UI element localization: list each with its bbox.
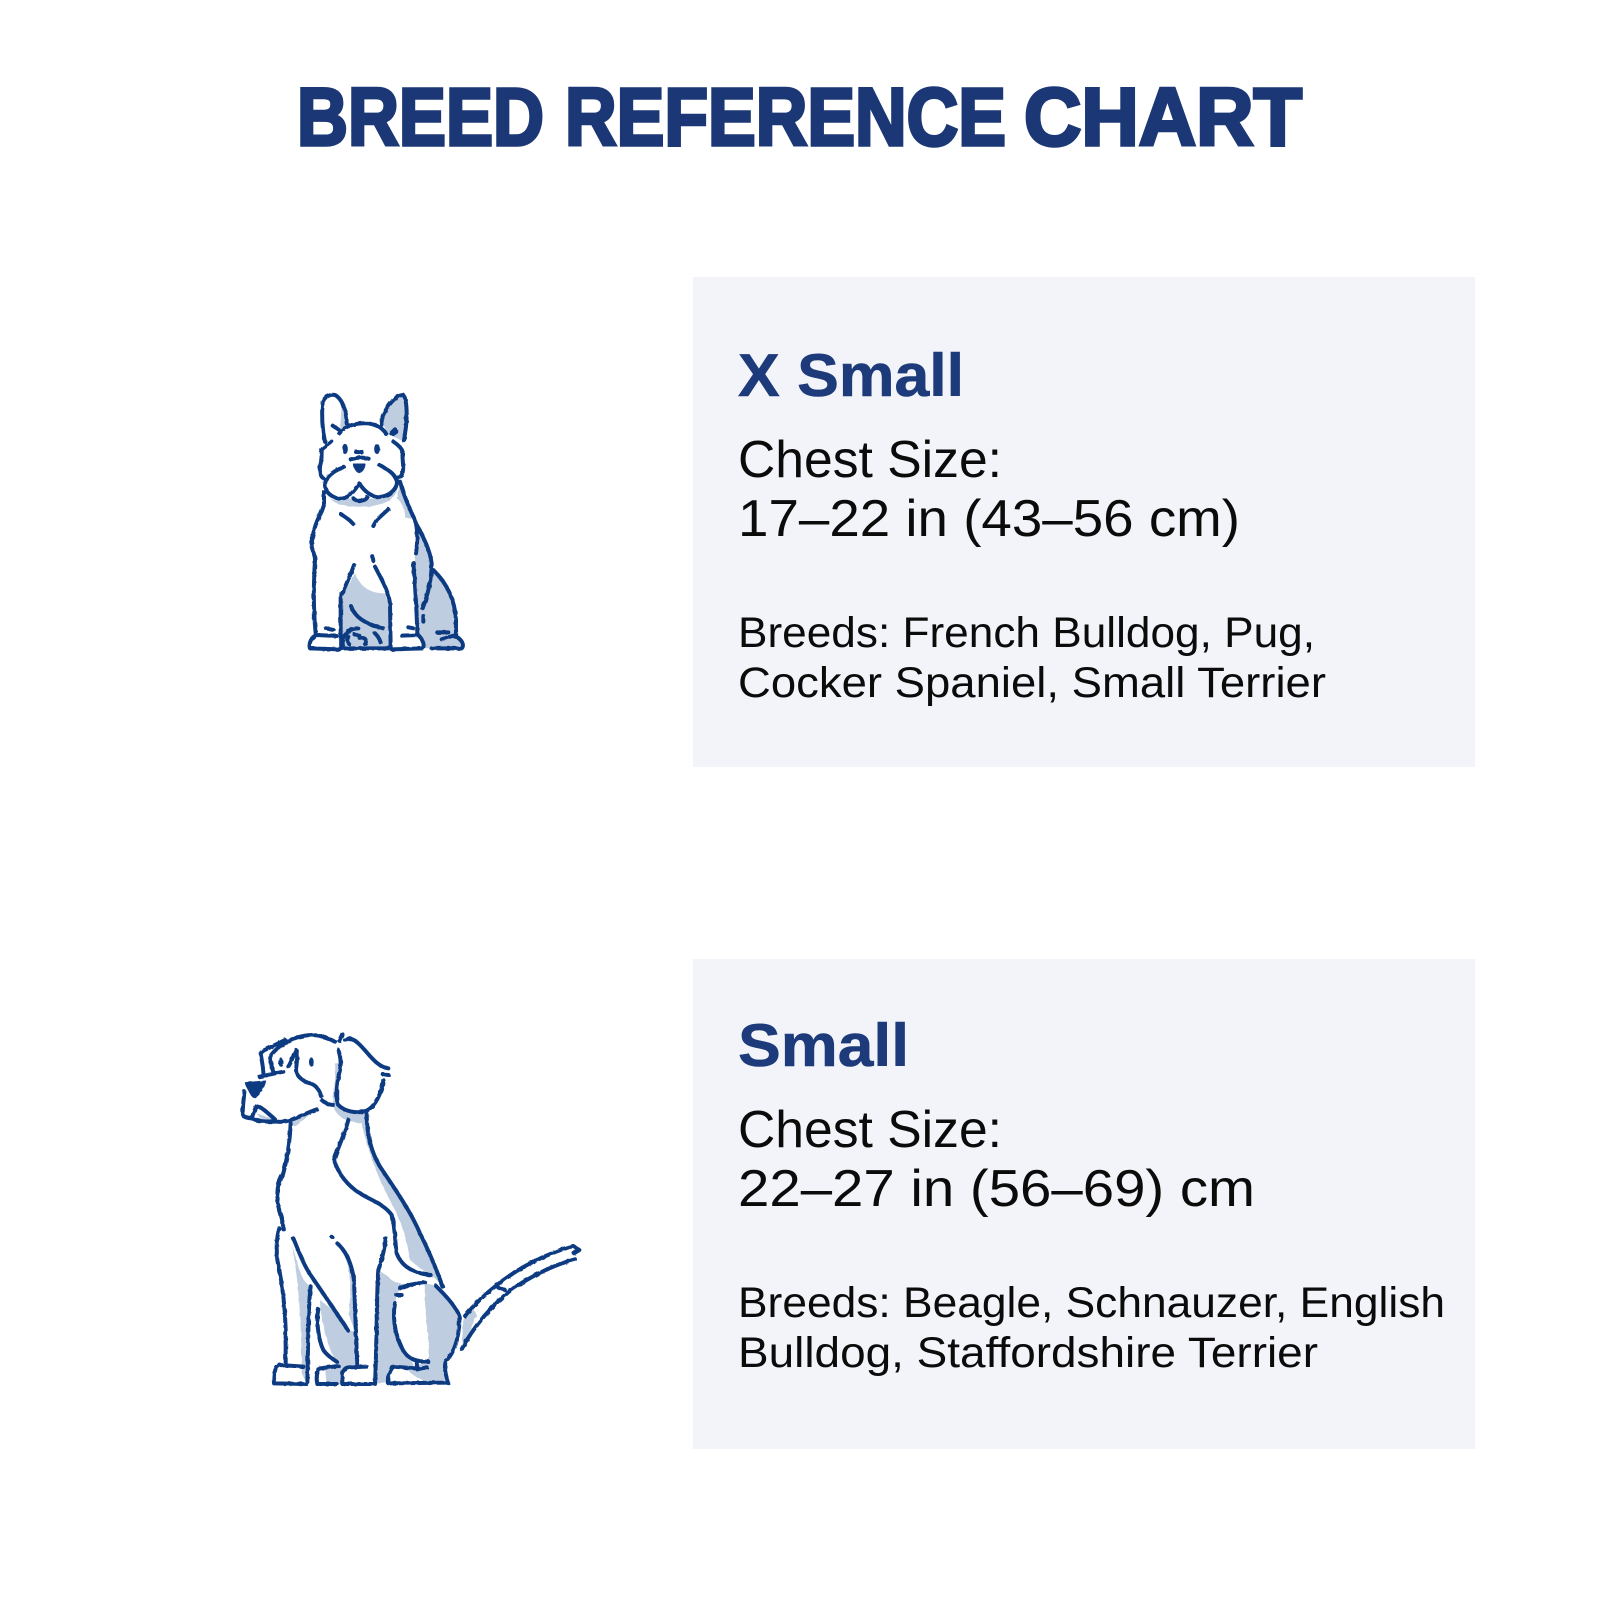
x small heading: X Small	[738, 342, 964, 409]
x small breeds: Cocker Spaniel, Small Terrier	[738, 660, 1326, 707]
x small chest size	[738, 431, 1240, 548]
small breeds: Breeds: Beagle, Schnauzer, English	[738, 1280, 1445, 1327]
small chest size: 22–27 in (56–69) cm	[738, 1160, 1255, 1218]
small breeds: Bulldog, Staffordshire Terrier	[738, 1330, 1318, 1377]
small chest size: Chest Size:	[738, 1101, 1002, 1159]
panel: x small	[693, 277, 1475, 767]
small chest size	[738, 1101, 1255, 1218]
x small breeds: Breeds: French Bulldog, Pug,	[738, 610, 1315, 657]
small breeds	[738, 1280, 1445, 1377]
x small chest size: Chest Size:	[738, 431, 1002, 489]
title: CHART	[1024, 72, 1302, 163]
small heading: Small	[738, 1012, 909, 1079]
title	[297, 72, 1302, 163]
icon: x small sitting bulldog	[310, 395, 463, 649]
x small chest size: 17–22 in (43–56 cm)	[738, 490, 1240, 548]
x small breeds	[738, 610, 1326, 707]
icon: small sitting beagle	[243, 1034, 579, 1384]
panel: small	[693, 959, 1475, 1449]
title: REFERENCE	[565, 72, 1006, 163]
title: BREED	[297, 72, 544, 163]
